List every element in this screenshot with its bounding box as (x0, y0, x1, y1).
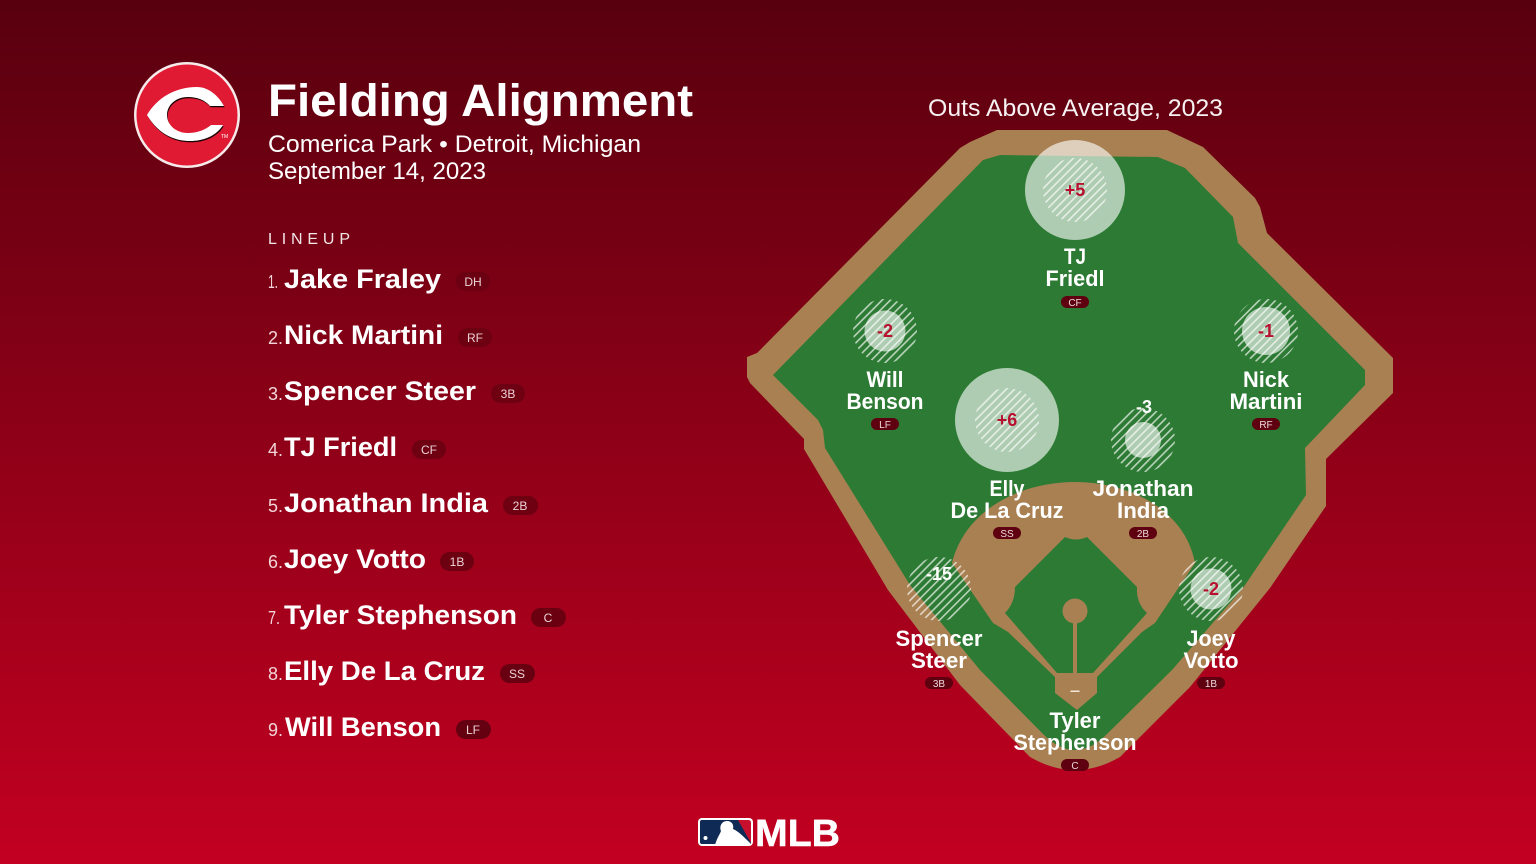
row 6: 6. (268, 552, 283, 572)
row 1: Jake Fraley (284, 264, 441, 294)
infield grass (1005, 537, 1147, 673)
fielder: left field: Benson (846, 389, 924, 414)
fielder: shortstop: SS (1000, 529, 1014, 540)
fielder: first base: Votto (1184, 648, 1238, 673)
row 7: 7. (268, 608, 280, 628)
row 9: 9. (268, 720, 283, 740)
row 2: 2. (268, 328, 283, 348)
fielder: second base: Jonathan (1092, 476, 1194, 501)
row 4 (268, 432, 446, 462)
row 8: SS (509, 667, 525, 681)
fielder: first base: Joey (1186, 626, 1236, 651)
fielder: first base (1179, 557, 1243, 690)
fielder: right field: RF (1259, 420, 1273, 431)
row 1: 1. (268, 272, 278, 292)
row 4: TJ Friedl (284, 432, 397, 462)
fielder: first base: -2 (1203, 579, 1219, 599)
row 4: 4. (268, 440, 283, 460)
row 3: 3. (268, 384, 283, 404)
fielder: center field: Friedl (1046, 266, 1104, 291)
row 6 (268, 544, 474, 574)
home plate (1070, 690, 1080, 692)
team logo: Reds C: TM (221, 134, 228, 140)
row 6: 1B (450, 555, 464, 569)
fielder: third base: 3B (933, 679, 945, 690)
row 9: LF (466, 723, 480, 737)
baseball field (747, 130, 1393, 770)
fielder: right field (1230, 299, 1302, 431)
fielder: left field: Will (866, 367, 904, 392)
row 2 (268, 320, 492, 350)
fielder: right field: Nick (1243, 367, 1290, 392)
row 8: Elly De La Cruz (284, 656, 485, 686)
fielder: third base (896, 557, 983, 690)
fielder: shortstop (950, 368, 1064, 540)
warning track (747, 130, 1393, 770)
fielder: center field: CF (1068, 298, 1082, 309)
lineup list (268, 264, 566, 742)
fielder: first base: 1B (1205, 679, 1217, 690)
lineup heading: LINEUP (268, 231, 350, 248)
row 1 (268, 264, 490, 294)
fielder: catcher: Stephenson (1014, 730, 1136, 755)
fielder: second base: India (1117, 498, 1170, 523)
row 3: Spencer Steer (284, 376, 477, 406)
row 5: 5. (268, 496, 283, 516)
row 5: Jonathan India (284, 488, 489, 518)
row 9 (268, 712, 491, 742)
row 8: 8. (268, 664, 283, 684)
row 2: RF (467, 331, 483, 345)
fielder: third base: Steer (911, 648, 967, 673)
row 5: 2B (513, 499, 527, 513)
fielder: shortstop: De La Cruz (950, 498, 1064, 523)
pitcher's mound (1062, 598, 1088, 624)
infield dirt (952, 482, 1195, 710)
row 7: C (544, 611, 553, 625)
row 1: DH (464, 275, 482, 289)
fielder: second base: 2B (1137, 529, 1149, 540)
fielder: second base (1092, 397, 1194, 540)
subtitle: venue: Comerica Park • Detroit, Michigan (268, 131, 641, 158)
fielder: center field: +5 (1065, 180, 1085, 200)
fielder: shortstop: +6 (997, 410, 1017, 430)
title: Fielding Alignment (268, 75, 693, 126)
row 6: Joey Votto (284, 544, 426, 574)
fielder: catcher (1014, 708, 1136, 772)
MLB logo (698, 813, 840, 855)
row 7: Tyler Stephenson (284, 600, 517, 630)
row 2: Nick Martini (284, 320, 443, 350)
fielder: center field (1025, 140, 1125, 309)
chart heading: Outs Above Average, 2023 (928, 95, 1223, 122)
MLB logo: MLB (755, 813, 840, 855)
subtitle: date: September 14, 2023 (268, 158, 486, 185)
fielder: shortstop: Elly (990, 476, 1025, 501)
fielder: center field: TJ (1064, 244, 1086, 269)
fielder: left field: LF (879, 420, 891, 431)
fielder: left field: -2 (877, 321, 893, 341)
fielder: catcher: Tyler (1050, 708, 1101, 733)
fielder: catcher: C (1071, 761, 1079, 772)
row 4: CF (421, 443, 437, 457)
fielder: third base: Spencer (896, 626, 983, 651)
outfield grass (773, 155, 1365, 750)
row 9: Will Benson (285, 712, 441, 742)
row 3: 3B (501, 387, 515, 401)
fielder: right field: -1 (1258, 321, 1274, 341)
team logo: Reds C (134, 62, 240, 168)
fielder: right field: Martini (1230, 389, 1302, 414)
fielder: left field (846, 299, 924, 431)
fielder: third base: -15 (926, 564, 952, 584)
fielder: second base: -3 (1136, 397, 1152, 417)
